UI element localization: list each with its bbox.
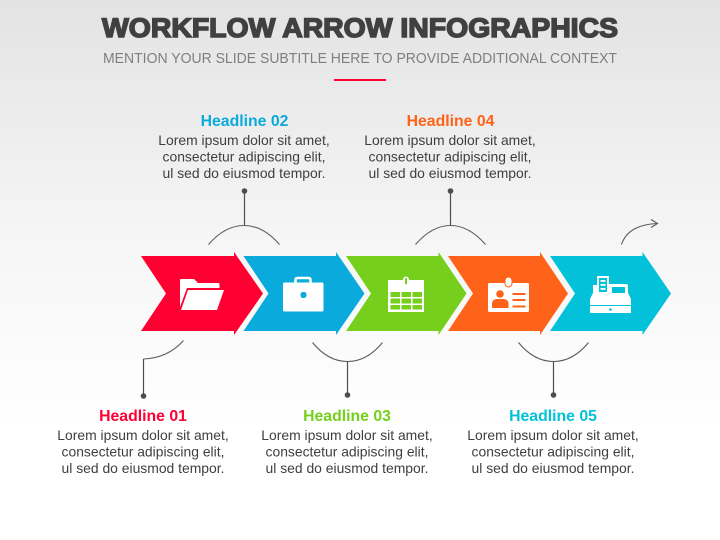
text block: headline 01: consectetur adipiscing elit,: [62, 444, 224, 460]
icon: briefcase: [283, 278, 324, 312]
icon: folder: [180, 279, 224, 310]
arrow 5: cyan: [550, 252, 671, 335]
text block: headline 02: consectetur adipiscing elit,: [163, 148, 325, 164]
connector: headline 02: [208, 188, 280, 244]
text block: headline 05: consectetur adipiscing elit,: [472, 444, 634, 460]
text block: headline 04: Lorem ipsum dolor sit amet,: [364, 132, 536, 148]
text block: headline 04: [364, 113, 536, 181]
arrow 3: green: [346, 252, 466, 335]
icon: cash register: [590, 276, 631, 313]
connector: headline 03: [312, 342, 382, 398]
text block: headline 02: Lorem ipsum dolor sit amet,: [158, 132, 330, 148]
text block: headline 03: consectetur adipiscing elit,: [266, 444, 428, 460]
text block: headline 01: Lorem ipsum dolor sit amet,: [57, 427, 229, 443]
icon: id badge: [488, 277, 529, 312]
arrow 4: orange: [448, 252, 568, 335]
text block: headline 04: consectetur adipiscing elit,: [369, 148, 531, 164]
arrow 1: red: [141, 252, 263, 335]
text block: headline 04: Headline 04: [407, 113, 495, 130]
text block: headline 05: Headline 05: [509, 408, 597, 425]
connector: headline 04: [416, 188, 486, 244]
text block: headline 02: [158, 113, 330, 181]
text block: headline 05: Lorem ipsum dolor sit amet,: [467, 427, 639, 443]
text block: headline 02: Headline 02: [201, 113, 289, 130]
title: WORKFLOW ARROW INFOGRAPHICS: [102, 13, 618, 43]
arrow 2: blue: [244, 252, 364, 335]
text block: headline 05: [467, 408, 639, 476]
text block: headline 01: Headline 01: [99, 408, 187, 425]
text block: headline 03: Headline 03: [303, 408, 391, 425]
text block: headline 02: ul sed do eiusmod tempor.: [163, 165, 325, 181]
connector: headline 05: [518, 342, 588, 398]
text block: headline 03: [261, 408, 433, 476]
text block: headline 03: Lorem ipsum dolor sit amet,: [261, 427, 433, 443]
title accent line: [334, 79, 386, 81]
text block: headline 03: ul sed do eiusmod tempor.: [266, 460, 428, 476]
text block: headline 01: [57, 408, 229, 476]
arrow: outgoing curve: [622, 220, 658, 244]
text block: headline 05: ul sed do eiusmod tempor.: [472, 460, 634, 476]
subtitle: MENTION YOUR SLIDE SUBTITLE HERE TO PROVIDE ADDITIONAL CONTEXT: [103, 51, 617, 67]
text block: headline 01: ul sed do eiusmod tempor.: [62, 460, 224, 476]
text block: headline 04: ul sed do eiusmod tempor.: [369, 165, 531, 181]
icon: calendar: [388, 276, 424, 312]
connector: headline 01: [141, 340, 184, 399]
